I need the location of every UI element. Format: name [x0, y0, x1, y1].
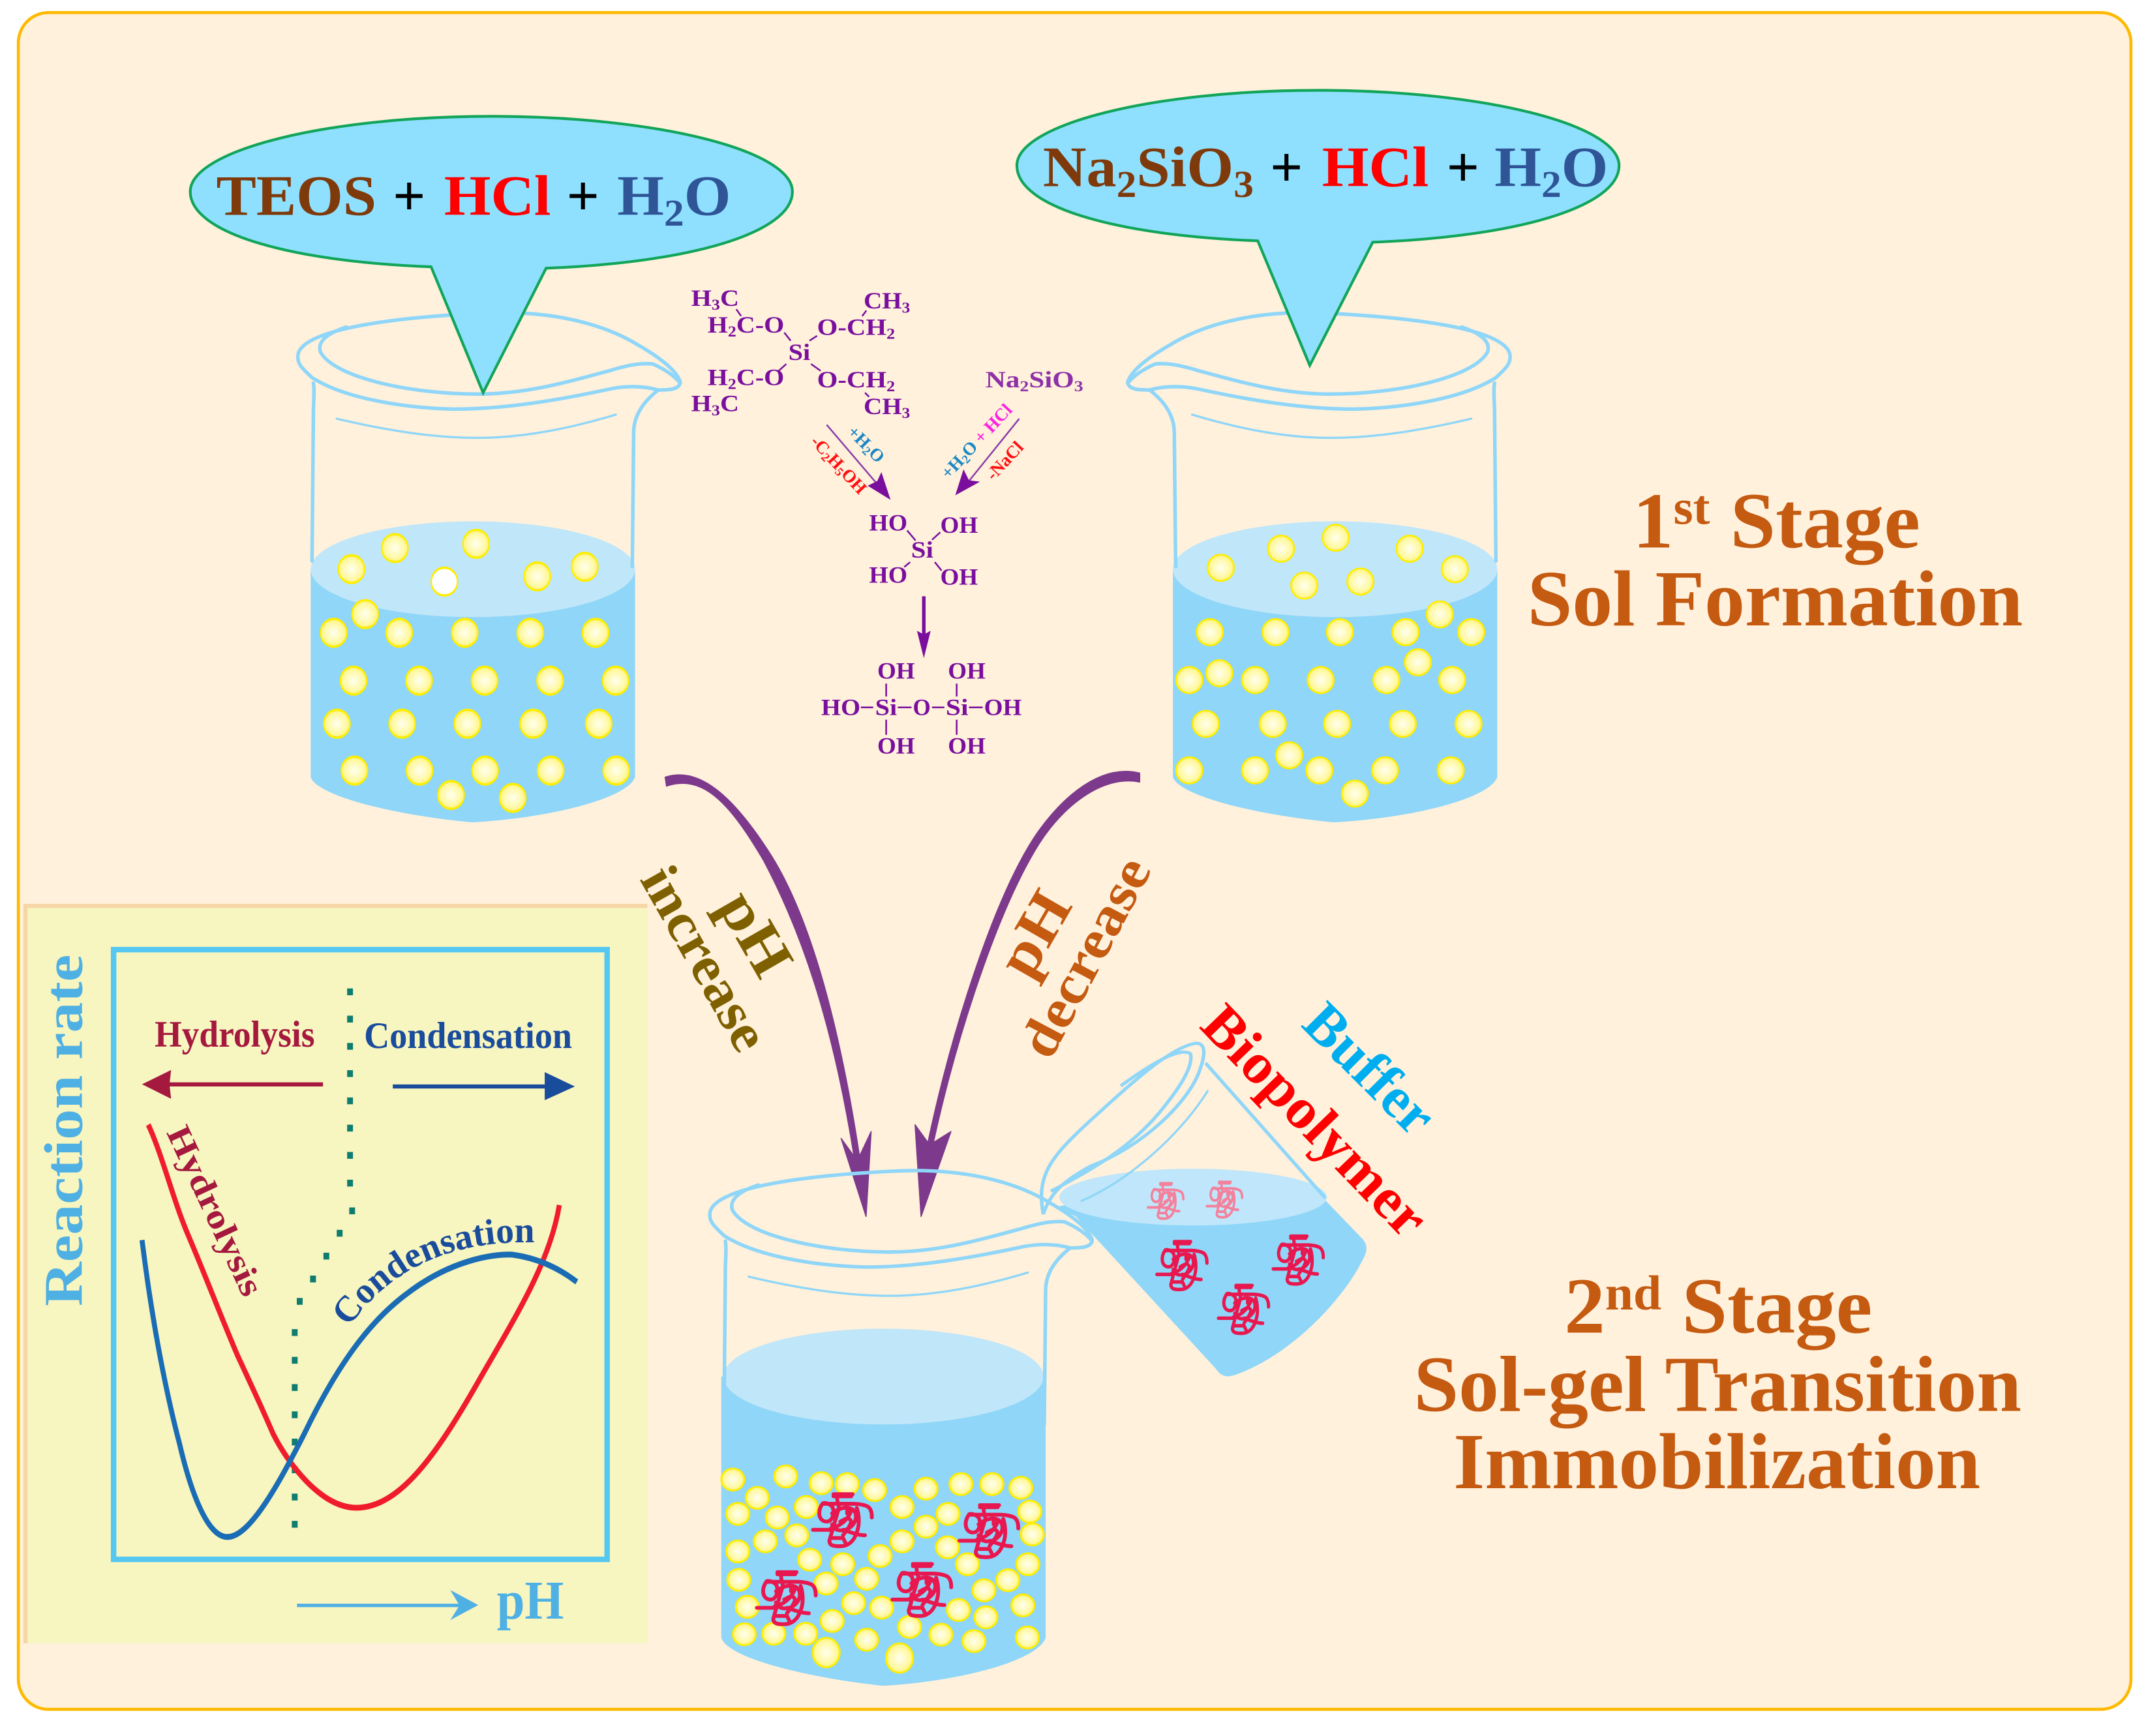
disiloxane product: Si — [946, 695, 969, 721]
sodium silicate label: Na — [986, 367, 1014, 393]
silica particles in gel — [721, 1465, 1044, 1673]
sodium silicate label: SiO — [1029, 367, 1074, 393]
silicic acid — [869, 509, 978, 590]
right beaker: sodium silicate sol — [1128, 312, 1510, 822]
callout: TEOS + HCl + H2O: O — [684, 164, 731, 228]
arrow: hydrolysis of TEOS — [826, 425, 890, 500]
callout: TEOS + HCl + H2O: + — [393, 164, 425, 228]
TEOS structure: 2 — [728, 376, 736, 393]
silica particles in left beaker — [321, 530, 629, 812]
arrow: hydrolysis direction — [142, 1070, 323, 1099]
label: +H2O + HCl: +H — [937, 452, 968, 483]
callout: Na2SiO3 + HCl + H2O — [1017, 90, 1619, 365]
bottom beaker: gel with immobilized biopolymer — [710, 1171, 1092, 1686]
divider dots — [292, 989, 355, 1528]
callout: Na2SiO3 + HCl + H2O: 2 — [1117, 163, 1136, 205]
TEOS structure: O-CH — [817, 314, 878, 340]
heading: 1st stage sol formation: Sol Formation — [1528, 556, 2023, 643]
heading: 2nd stage sol-gel transition immobilization: nd — [1605, 1266, 1661, 1321]
silica particles in right beaker — [1176, 524, 1485, 807]
disiloxane product: HO — [821, 695, 860, 721]
TEOS structure: 3 — [712, 402, 720, 419]
chart frame — [113, 950, 607, 1559]
disiloxane product: OH — [877, 658, 915, 684]
chart panel: reaction rate vs pH: Condensation — [335, 1220, 534, 1321]
callout: TEOS + HCl + H2O: HCl — [444, 164, 551, 228]
TEOS structure: 3 — [712, 296, 720, 313]
label: -C2H5OH: OH — [838, 464, 871, 498]
disiloxane product: OH — [948, 732, 986, 758]
label: -C2H5OH: H — [824, 450, 847, 473]
TEOS structure: H — [708, 312, 726, 338]
sodium silicate label: 2 — [1020, 378, 1029, 395]
TEOS structure: Si — [789, 339, 810, 365]
callout: Na2SiO3 + HCl + H2O: SiO — [1136, 135, 1233, 199]
silicic acid: Si — [911, 537, 933, 563]
callout: Na2SiO3 + HCl + H2O: Na — [1043, 135, 1113, 199]
disiloxane product: Si — [875, 695, 897, 721]
callout: Na2SiO3 + HCl + H2O: O — [1562, 135, 1608, 199]
callout: Na2SiO3 + HCl + H2O: 2 — [1541, 163, 1562, 205]
TEOS structure: 2 — [728, 323, 736, 340]
heading: 2nd stage sol-gel transition immobilization: Immobilization — [1453, 1418, 1980, 1506]
heading: 1st stage sol formation — [1528, 477, 2023, 643]
disiloxane product: OH — [984, 695, 1022, 721]
left beaker: TEOS sol — [298, 312, 680, 822]
callout: Na2SiO3 + HCl + H2O: 3 — [1233, 163, 1254, 205]
label: +H2O: 2 — [859, 444, 873, 458]
TEOS structure: C — [720, 285, 739, 311]
arrow: hydrolysis of silicate — [956, 419, 1020, 496]
callout: Na2SiO3 + HCl + H2O: + — [1270, 135, 1303, 199]
label: -C2H5OH: -C — [807, 432, 834, 458]
label: +H2O: O — [865, 443, 888, 467]
arrow: condensation direction — [393, 1072, 575, 1100]
heading: 1st stage sol formation: Stage — [1710, 477, 1920, 565]
heading: 2nd stage sol-gel transition immobilization: Stage — [1661, 1263, 1872, 1351]
TEOS structure — [691, 285, 910, 421]
chart panel: reaction rate vs pH — [23, 904, 647, 1643]
curve label: condensation — [349, 1242, 537, 1327]
label: pH increase: pH — [706, 879, 807, 988]
TEOS structure: C-O — [736, 364, 784, 390]
callout: Na2SiO3 + HCl + H2O: + — [1447, 135, 1479, 199]
axis label: pH: pH — [497, 1570, 564, 1631]
pale biopolymer coils — [1148, 1182, 1242, 1219]
silicic acid: OH — [940, 512, 978, 538]
axis label: reaction rate: Reaction rate — [33, 955, 94, 1306]
callout: Na2SiO3 + HCl + H2O: H — [1494, 135, 1539, 199]
disiloxane product: OH — [948, 658, 986, 684]
callout: Na2SiO3 + HCl + H2O: HCl — [1322, 135, 1429, 199]
TEOS structure: 3 — [902, 299, 910, 316]
disiloxane product: OH — [877, 732, 915, 758]
disiloxane product — [821, 658, 1022, 758]
heading: 2nd stage sol-gel transition immobilization — [1413, 1263, 2021, 1506]
callout: TEOS + HCl + H2O: + — [567, 164, 599, 228]
label: pH decrease: decrease — [1008, 847, 1163, 1068]
TEOS structure: H — [691, 391, 709, 417]
label: -C2H5OH: 5 — [832, 466, 846, 479]
label: +H2O + HCl: O — [958, 434, 984, 460]
TEOS structure: 3 — [902, 404, 910, 421]
label: +H2O + HCl: + HCl — [970, 400, 1016, 447]
sodium silicate label: 3 — [1074, 378, 1083, 395]
TEOS structure: CH — [864, 393, 898, 419]
callout: TEOS + HCl + H2O: H — [617, 164, 662, 228]
label: +H2O + HCl: 2 — [960, 453, 973, 466]
label: pH decrease: pH — [983, 879, 1085, 988]
biopolymer coils in gel — [757, 1494, 1018, 1624]
TEOS structure: 2 — [886, 325, 895, 342]
callout: TEOS + HCl + H2O — [190, 116, 793, 393]
TEOS structure: H — [691, 285, 709, 311]
TEOS structure: O-CH — [817, 367, 878, 393]
biopolymer coils in pouring beaker — [1157, 1236, 1323, 1333]
callout: TEOS + HCl + H2O: 2 — [664, 192, 684, 234]
silicic acid: HO — [869, 562, 907, 588]
heading: 2nd stage sol-gel transition immobilization: 2 — [1564, 1263, 1604, 1351]
TEOS structure: 2 — [886, 378, 895, 395]
silicic acid: HO — [869, 509, 907, 535]
label: hydrolysis: Hydrolysis — [155, 1015, 315, 1055]
heading: 1st stage sol formation: 1 — [1633, 477, 1672, 565]
curve: condensation — [142, 1240, 577, 1537]
arrow: condensation — [917, 596, 931, 658]
arrow: pH increase — [665, 775, 871, 1216]
label: -NaCl: -NaCl — [982, 437, 1027, 484]
heading: 2nd stage sol-gel transition immobilization: Sol-gel Transition — [1413, 1341, 2021, 1428]
TEOS structure: C — [720, 391, 739, 417]
pouring beaker with buffer and biopolymer — [1042, 1043, 1367, 1376]
callout: TEOS + HCl + H2O: TEOS — [217, 164, 376, 228]
label: buffer: Buffer — [1291, 990, 1449, 1148]
curve label: hydrolysis: Hydrolysis — [159, 1120, 271, 1302]
heading: 1st stage sol formation: st — [1674, 481, 1710, 535]
disiloxane product: O — [913, 695, 931, 721]
label: +H2O: +H — [843, 422, 875, 453]
label: condensation: Condensation — [364, 1016, 572, 1056]
TEOS structure: C-O — [736, 312, 784, 338]
axis arrow: pH — [297, 1590, 478, 1620]
label: -C2H5OH: 2 — [818, 451, 832, 464]
label: biopolymer: Biopolymer — [1189, 992, 1442, 1250]
chemical reaction scheme — [691, 285, 1083, 758]
silicic acid: OH — [940, 564, 978, 590]
arrow: pH decrease — [915, 771, 1140, 1216]
TEOS structure: CH — [864, 288, 898, 314]
curve: hydrolysis — [148, 1125, 560, 1508]
TEOS structure: H — [708, 364, 726, 390]
label: pH increase: increase — [629, 856, 781, 1062]
